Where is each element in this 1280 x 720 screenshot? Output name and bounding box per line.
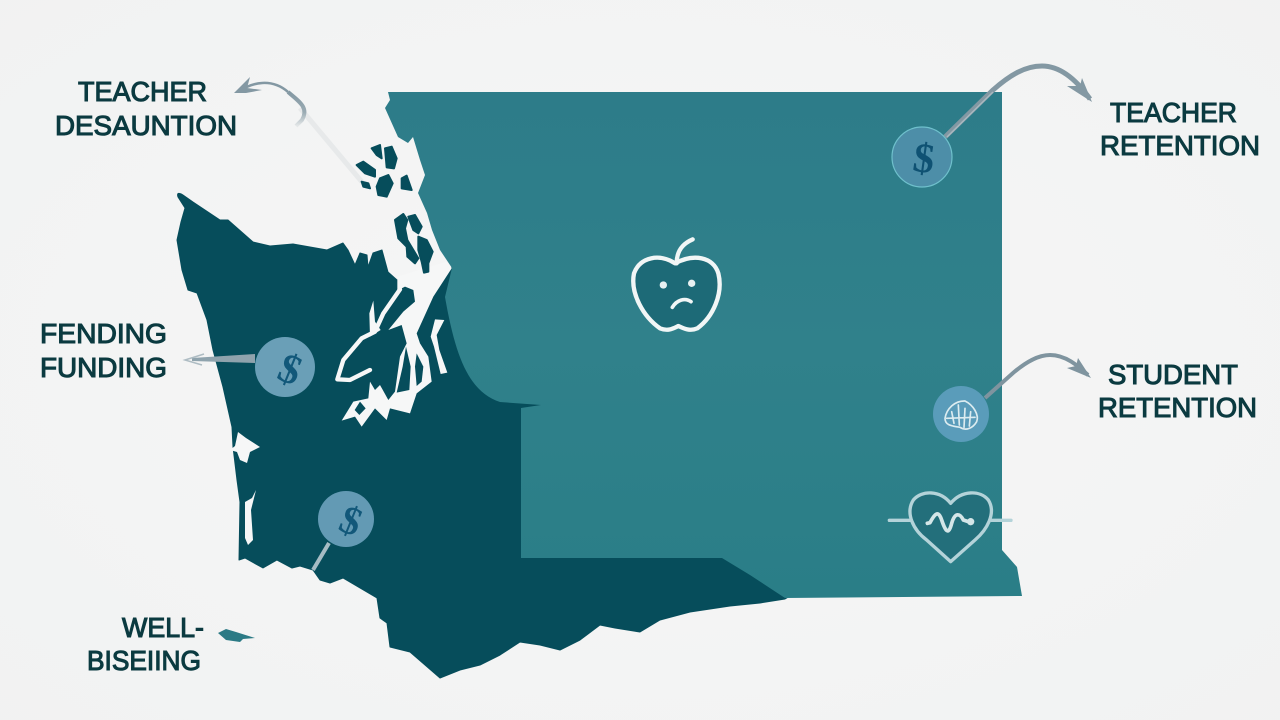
region: western Washington (dark) (177, 193, 800, 678)
icon: lower dollar coin (318, 491, 374, 547)
coast: western harbor inlet (230, 432, 260, 463)
label: teacher retention: RETENTION (1100, 130, 1260, 161)
sound: northern inlet spur (369, 301, 381, 337)
icon: teacher retention dollar coin: $ (910, 135, 937, 183)
sound: eastern inlet (431, 319, 447, 374)
label: teacher retention: TEACHER (1110, 97, 1237, 128)
icon: sad apple (633, 239, 720, 330)
label: teacher desauntion: DESAUNTION (55, 110, 237, 141)
sound: dark inner wedge one (397, 347, 411, 393)
coast: southern bay strip (245, 490, 256, 545)
connector: lower dollar coin stem (313, 543, 329, 570)
islands: Whidbey group (395, 214, 433, 273)
islands: San Juan group (357, 145, 412, 197)
map: Washington state (177, 92, 1022, 678)
label: fending funding: FUNDING (40, 352, 167, 383)
icon: brain coin (933, 386, 989, 442)
Puget Sound cutouts and islands (337, 145, 452, 427)
label: well-being: BISEIING (87, 645, 201, 676)
sound: main water body (342, 262, 452, 427)
mark: small teal smudge (218, 629, 255, 642)
icon: funding dollar coin (255, 337, 315, 397)
sound: small dark island (355, 402, 366, 415)
icon: teacher retention dollar coin (892, 127, 952, 187)
label: student retention (1098, 359, 1257, 423)
label: student retention: STUDENT (1108, 359, 1238, 390)
arrow: funding coin to label (185, 354, 255, 365)
sound: dark inner wedge two (415, 353, 423, 386)
icon: lower dollar coin: $ (333, 496, 369, 545)
arrow: coin to teacher retention (945, 66, 1092, 137)
label: teacher retention (1100, 97, 1260, 161)
label: well-being (87, 612, 204, 676)
label: teacher desauntion: TEACHER (78, 76, 207, 107)
icon: funding dollar coin: $ (272, 345, 308, 395)
label: student retention: RETENTION (1098, 392, 1257, 423)
label: fending funding: FENDING (40, 318, 167, 349)
region: eastern Washington (teal) (385, 92, 1022, 598)
label: well-being: WELL- (122, 612, 204, 643)
label: fending funding (40, 318, 167, 383)
arrow: to teacher desauntion (234, 77, 304, 126)
arrow: brain coin to student retention (985, 355, 1091, 398)
label: teacher desauntion (55, 76, 237, 141)
sound: inlet strokes (337, 289, 400, 380)
icon: heart with pulse (889, 493, 1011, 562)
